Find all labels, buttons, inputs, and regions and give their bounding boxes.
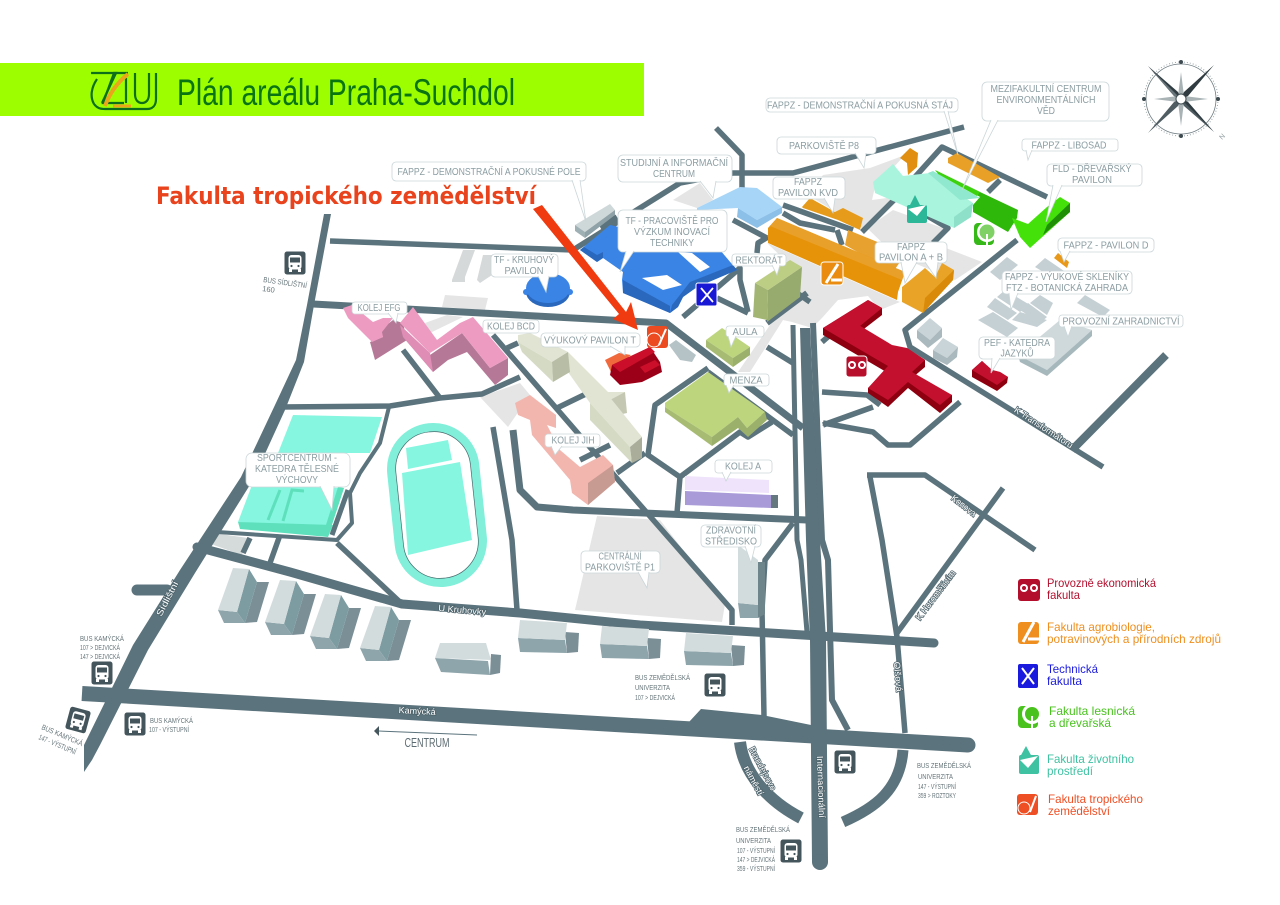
bus stop: Zemědělská univerzita 107: BUS ZEMĚDĚLSKÁ [635,673,690,682]
bus stop: Zemědělská univerzita 147: UNIVERZITA [918,772,953,781]
callout: výukový pavilon T: VÝUKOVÝ PAVILON T [544,334,636,346]
callout: katedra jazyků [979,337,1055,373]
block row 3 [310,594,361,649]
callout: kolej BCD: KOLEJ BCD [487,322,535,332]
bus stop: Kamýcká top: 107 > DEJVICKÁ [80,643,120,652]
bus stop: Zemědělská univerzita 147: BUS ZEMĚDĚLSKÁ [917,761,971,770]
logo: CZU [91,73,156,109]
callout: kolej JIH: KOLEJ JIH [552,436,594,446]
bus stop: Kamýcká top: BUS KAMÝCKÁ [80,634,124,643]
street names: K Horoměřicím [914,568,958,622]
road: U Kruhovky [197,547,934,643]
callout: zdravotní středisko [701,524,761,563]
callout: libosad: FAPPZ - LIBOSAD [1032,140,1106,152]
bus stop: Zemědělská univerzita bottom: 107 - VÝSTUPNÍ [737,846,776,855]
legend: Fakulta tropického zemědělství: Fakulta tropického [1048,792,1143,806]
bus stop: Kamýcká top [80,634,124,684]
callout: parkoviště P8 [777,137,876,168]
callout: mezifakultní centrum: VĚD [1037,104,1055,117]
callout: kolej A: KOLEJ A [725,462,761,472]
callout: provozní zahradnictví: PROVOZNÍ ZAHRADNICTVÍ [1062,314,1180,328]
street names: Kamýcká [398,705,436,717]
callout: centrální parkoviště: CENTRÁLNÍ [598,550,642,562]
legend: Fakulta životního prostředí [1019,746,1134,778]
icon: bird environment [907,195,927,223]
block 7 [600,626,661,659]
callout: skleníky: FAPPZ - VÝUKOVÉ SKLENÍKY [1005,270,1129,283]
bus stop: Kamýcká 107: 107 - VÝSTUPNÍ [149,725,190,734]
bus stop: Sídlištní: 160 [262,284,275,295]
callout: centrální parkoviště: PARKOVIŠTĚ P1 [585,560,655,574]
legend: Fakulta tropického zemědělství [1017,792,1143,818]
football and athletics track [387,423,487,587]
building: výukový pavilon T [605,347,662,385]
building: light blue study centre [697,187,782,228]
callout: FLD dřevařský: FLD - DŘEVAŘSKÝ [1052,162,1132,175]
legend: Fakulta životního prostředí: prostředí [1047,764,1094,778]
legend: Fakulta lesnická a dřevařská: a dřevařská [1049,716,1111,730]
road: Sídlištní [84,214,331,772]
building: salmon dorm JIH [515,395,615,505]
red highlight arrow [533,205,638,330]
legend: Fakulta agrobiologie: potravinových a přírodních zdrojů [1047,632,1221,646]
bus stop: Kamýcká 107 [124,712,193,736]
callout: kruhový pavilon [491,253,558,292]
icon: owl PEF [846,356,867,377]
callout: kolej JIH [545,434,600,455]
icon: wheat FAPPZ [821,262,843,285]
centrum direction arrow: CENTRUM [404,735,450,750]
bus stop: Kamýcká 147 [37,706,91,757]
building: TF blue complex [580,225,737,313]
callout: centrální parkoviště [581,550,660,588]
highlight heading: Fakulta tropického zemědělství [156,182,538,210]
street names: Internacionální [815,756,827,819]
callout: studijní centrum: CENTRUM [653,169,695,180]
legend: Provozně ekonomická fakulta [1018,576,1156,602]
building: aula [706,328,750,367]
callout: menza: MENZA [730,376,763,386]
building: beige dorm BCD [518,333,642,463]
callout: sportcentrum [246,453,350,510]
bus stop: Zemědělská univerzita 107: UNIVERZITA [635,683,670,692]
block row 2 [265,580,316,635]
callout: libosad [1022,139,1118,160]
building: FAPPZ orange pavilions [768,148,1069,313]
building: menza [665,372,767,446]
icon: tree FLD [974,222,997,246]
block 8 [684,633,745,666]
callout: sportcentrum: VÝCHOVY [276,473,318,486]
bus stop: Zemědělská univerzita 107 [635,673,726,702]
callout: parkoviště P8: PARKOVIŠTĚ P8 [789,139,859,152]
compass: N [1218,133,1227,141]
callout: skleníky [1002,270,1132,310]
callout: sportcentrum: KATEDRA TĚLESNÉ [255,462,339,475]
bus stop: Zemědělská univerzita bottom: BUS ZEMĚDĚLSKÁ [736,825,790,834]
callout: pavilon D: FAPPZ - PAVILON D [1064,240,1148,252]
greenhouses and garden buildings [978,257,1110,376]
callout: mezifakultní centrum: ENVIRONMENTÁLNÍCH [996,93,1096,106]
callout: aula: AULA [732,327,758,338]
callout: FAPPZ pole [392,162,586,222]
sportcentrum buildings [238,415,382,537]
legend: Provozně ekonomická fakulta: fakulta [1047,588,1080,602]
building: red PEF main [823,300,952,413]
street names: Brandejsovo [747,745,778,792]
callout: provozní zahradnictví [1059,314,1183,337]
zdravotní středisko building [738,545,765,618]
callout: aula [726,326,764,347]
callout: katedra jazyků: JAZYKŮ [1000,346,1034,360]
callout: FAPPZ stáj: FAPPZ - DEMONSTRAČNÍ A POKUSNÁ STÁJ [767,98,953,112]
callout: pavilon A + B: FAPPZ [897,242,925,253]
road: Kamýcká [82,694,968,745]
compass [1142,60,1227,141]
title text: Plán areálu Praha-Suchdol [177,72,515,113]
callout: rektorát: REKTORÁT [736,254,782,266]
Kamýcká widening [689,709,815,735]
callout: kolej EFG: KOLEJ EFG [358,303,401,314]
bus stop: Sídlištní: BUS SÍDLIŠTNÍ [263,275,308,290]
callout: menza [724,374,769,393]
callout: TF pracoviště: TF - PRACOVIŠTĚ PRO [626,214,719,227]
map callout labels [246,82,1183,588]
street names: náměstí [742,764,766,798]
callout: výukový pavilon T [541,333,640,355]
callout: kolej A [715,460,772,481]
callout: kruhový pavilon: TF - KRUHOVÝ [494,253,554,266]
callout: kruhový pavilon: PAVILON [504,266,544,277]
road network [82,127,1166,870]
secondary roads [217,127,1166,822]
callout: rektorát [732,254,786,275]
street names: Olšová [892,661,904,692]
legend: Provozně ekonomická fakulta: Provozně ekonomická [1047,576,1156,590]
callout: katedra jazyků: PEF - KATEDRA [984,338,1050,349]
bus stop: Kamýcká 147: BUS KAMÝCKÁ [40,723,84,748]
bus stop: Zemědělská univerzita bottom: UNIVERZITA [736,836,771,845]
legend: Technická fakulta [1018,662,1098,688]
bus stop: Kamýcká 147: 147 - VÝSTUPNÍ [37,733,78,757]
block 6 [518,620,579,653]
bus stop: Kamýcká 107: BUS KAMÝCKÁ [150,716,193,725]
grey buildings north [452,204,958,365]
legend: Fakulta tropického zemědělství: zemědělství [1048,804,1111,818]
callout: pavilon A + B [875,242,947,283]
grey residential blocks south [218,545,765,675]
icon: technical faculty [696,283,717,306]
legend: Fakulta agrobiologie [1018,620,1221,646]
centrum direction arrow [374,726,477,750]
street names: U Kruhovky [438,603,487,617]
legend: Fakulta lesnická a dřevařská [1018,704,1135,730]
building: TF kruhový pavilon [523,273,573,307]
plazas and parking areas [208,155,982,622]
callout: studijní centrum [618,155,732,198]
bus stop: Zemědělská univerzita bottom: 147 > DEJVICKÁ [737,855,775,864]
callout: mezifakultní centrum [962,82,1109,190]
block row 4 [360,606,411,661]
bus stop: Zemědělská univerzita bottom: 359 - VÝSTUPNÍ [737,864,776,873]
bus stop: Zemědělská univerzita 147 [834,750,971,800]
building: PEF katedra jazyků [972,361,1008,391]
callout: TF pracoviště: TECHNIKY [650,238,694,249]
block row 1 [218,568,269,623]
bus stop: Zemědělská univerzita 107: 107 > DEJVICKÁ [635,693,675,702]
bus stop: Zemědělská univerzita 147: 359 > ROZTOKY [918,791,956,800]
callout: mezifakultní centrum: MEZIFAKULTNÍ CENTRUM [990,82,1102,95]
callout: zdravotní středisko: STŘEDISKO [705,534,757,548]
legend: Fakulta lesnická a dřevařská: Fakulta lesnická [1049,704,1135,718]
icon: tropical faculty [647,326,668,348]
legend: Fakulta agrobiologie: Fakulta agrobiologie, [1047,620,1155,634]
bus stops [37,252,971,873]
legend: Technická fakulta: Technická [1047,662,1098,676]
callout: sportcentrum: SPORTCENTRUM - [257,453,337,464]
callout: TF pracoviště [618,210,727,272]
street names [154,405,1075,819]
callout: pavilon D [1058,238,1154,262]
callout: pavilon KVD [773,177,845,213]
legend: Technická fakulta: fakulta [1047,674,1082,688]
block 5 [435,643,501,675]
street names: Sídlištní [154,579,181,618]
building: mint environmental centre [873,164,980,228]
Brandejsovo náměstí road [740,742,801,818]
bus stop: Kamýcká top: 147 > DEJVICKÁ [80,652,120,661]
callout: FLD dřevařský: PAVILON [1072,175,1112,186]
building: pink dorm EFG [343,305,508,385]
faculty icons on map [647,195,997,377]
callout: FLD dřevařský [1046,162,1142,222]
callout: studijní centrum: STUDIJNÍ A INFORMAČNÍ [620,156,728,169]
road: Internacionální [800,328,828,862]
bus stop: Zemědělská univerzita 147: 147 - VÝSTUPNÍ [918,782,957,791]
title banner [0,63,644,116]
building: kolej A [685,476,778,508]
callout: TF pracoviště: VÝZKUM INOVACÍ [634,225,710,238]
callout: kolej EFG [352,302,407,323]
callout: pavilon KVD: FAPPZ [794,177,822,188]
callout: skleníky: FTZ - BOTANICKÁ ZAHRADA [1006,281,1128,294]
legend [1017,576,1221,818]
street names: K Transformátoru [1012,405,1075,450]
legend: Fakulta životního prostředí: Fakulta životního [1047,752,1134,766]
street names: Konova [949,493,978,519]
callout: pavilon A + B: PAVILON A + B [879,252,943,264]
bus stop: Sídlištní [262,252,308,295]
callout: pavilon KVD: PAVILON KVD [778,188,838,199]
building: rektorát [753,260,802,322]
callout: FAPPZ pole: FAPPZ - DEMONSTRAČNÍ A POKUSNÉ POLE [398,165,581,178]
building: green FLD pavilion [935,170,1070,248]
bus stop: Zemědělská univerzita bottom [736,825,802,873]
callout: FAPPZ stáj [766,98,958,155]
callout: zdravotní středisko: ZDRAVOTNÍ [706,524,756,536]
